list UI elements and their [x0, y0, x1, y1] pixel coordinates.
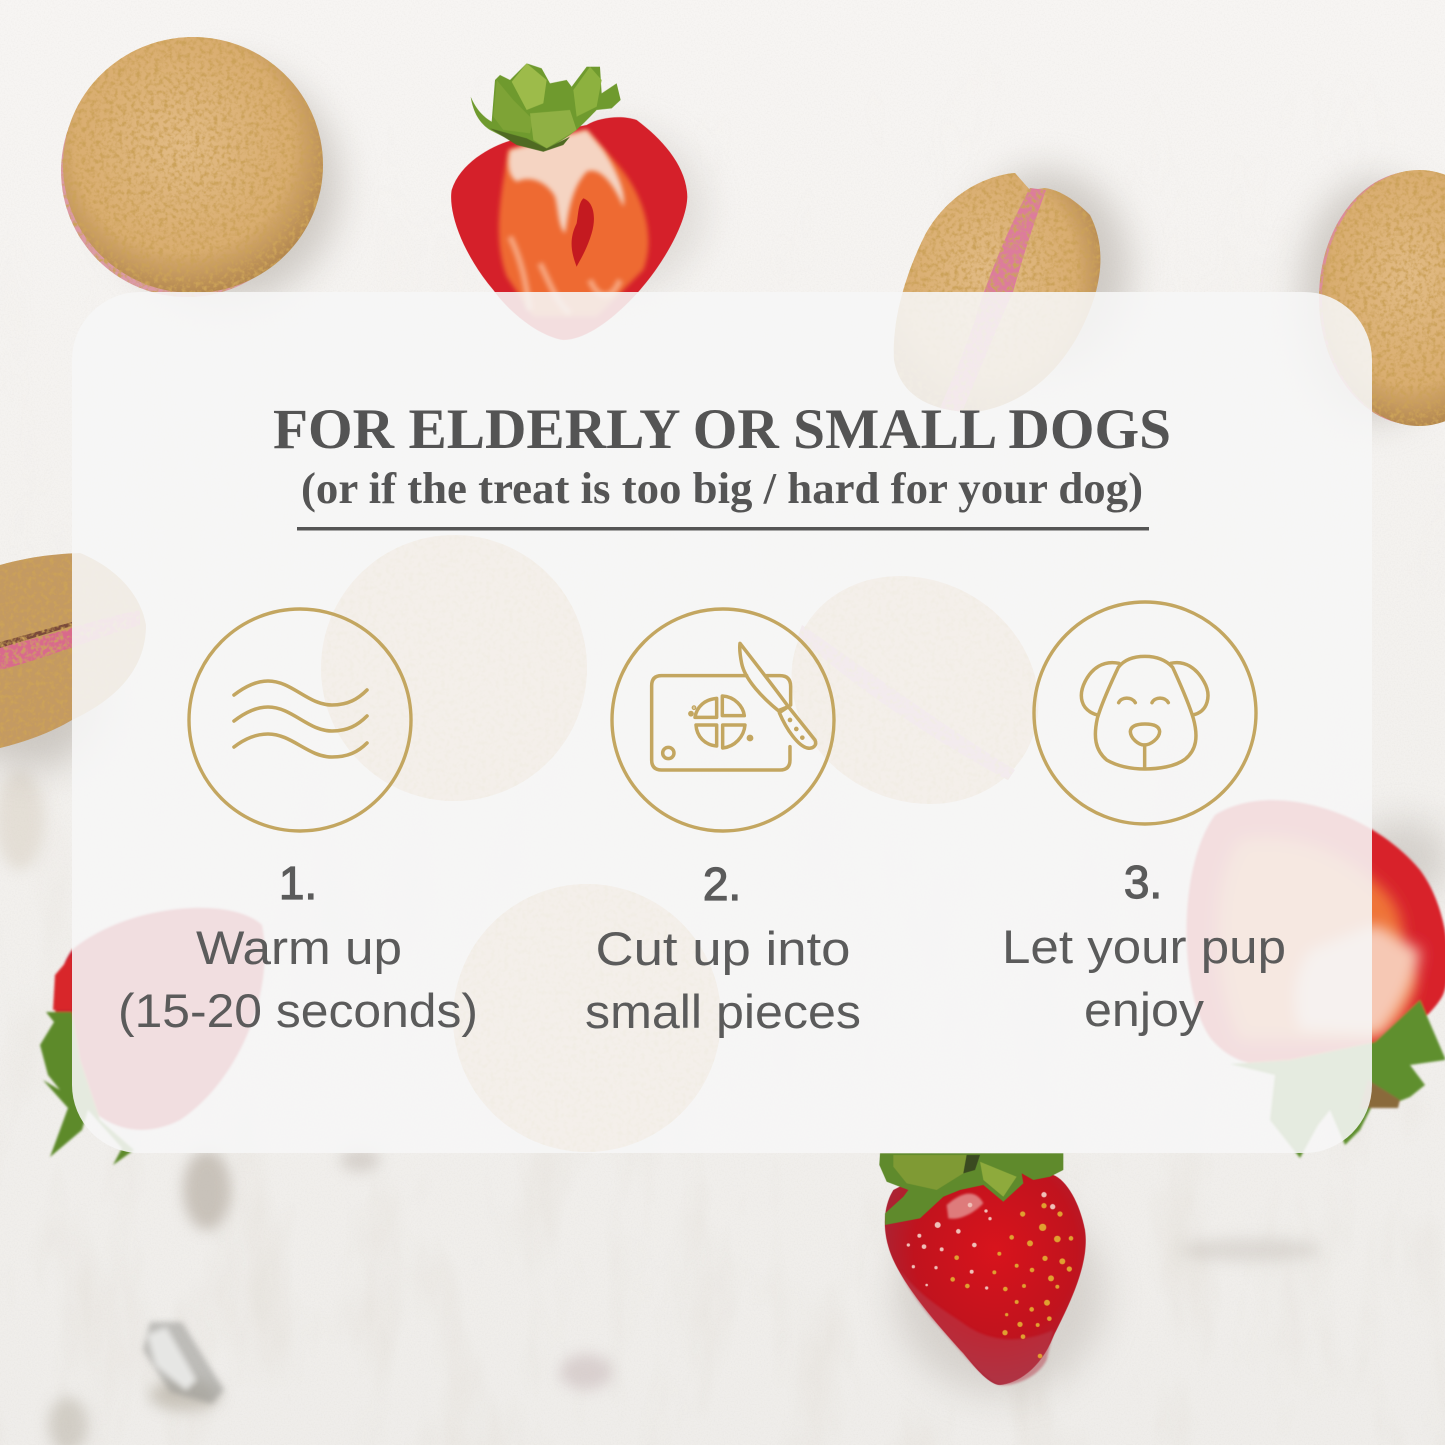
strawberry: right, halved	[1186, 800, 1445, 1158]
icon: cutting board and knife	[612, 609, 834, 831]
step 1 text: Warm up	[196, 921, 402, 974]
cookies behind the panel	[321, 535, 587, 801]
step 1	[118, 857, 478, 1037]
panel: instructions card	[72, 292, 1372, 1153]
step 3 text: Let your pup	[1002, 920, 1286, 973]
step 3 number: 3.	[1124, 856, 1162, 908]
step 2 number: 2.	[703, 858, 741, 910]
step 1 number: 1.	[279, 857, 317, 909]
cookie: right edge	[1319, 170, 1445, 426]
step 2: small pieces	[585, 985, 861, 1038]
icon: warm-up waves	[189, 609, 411, 831]
step 3	[1002, 856, 1286, 1036]
marble veins	[0, 770, 1320, 1445]
subheading: (or if the treat is too big / hard for your dog)	[301, 464, 1143, 513]
heading: FOR ELDERLY OR SMALL DOGS	[273, 398, 1171, 461]
marble rock fleck	[143, 1322, 224, 1404]
macaron: top centre	[894, 173, 1100, 412]
strawberry: bottom	[879, 1153, 1086, 1385]
step 2	[585, 858, 861, 1038]
step 3: enjoy	[1084, 983, 1205, 1036]
strawberry: left	[40, 908, 265, 1165]
strawberry half: top	[451, 63, 687, 340]
icon: happy dog	[1034, 602, 1256, 824]
step 1: (15-20 seconds)	[118, 984, 478, 1037]
heading underline	[297, 527, 1149, 530]
cookie: top left	[61, 37, 323, 297]
macaron: left edge	[0, 553, 146, 748]
step 2 text: Cut up into	[596, 922, 850, 975]
